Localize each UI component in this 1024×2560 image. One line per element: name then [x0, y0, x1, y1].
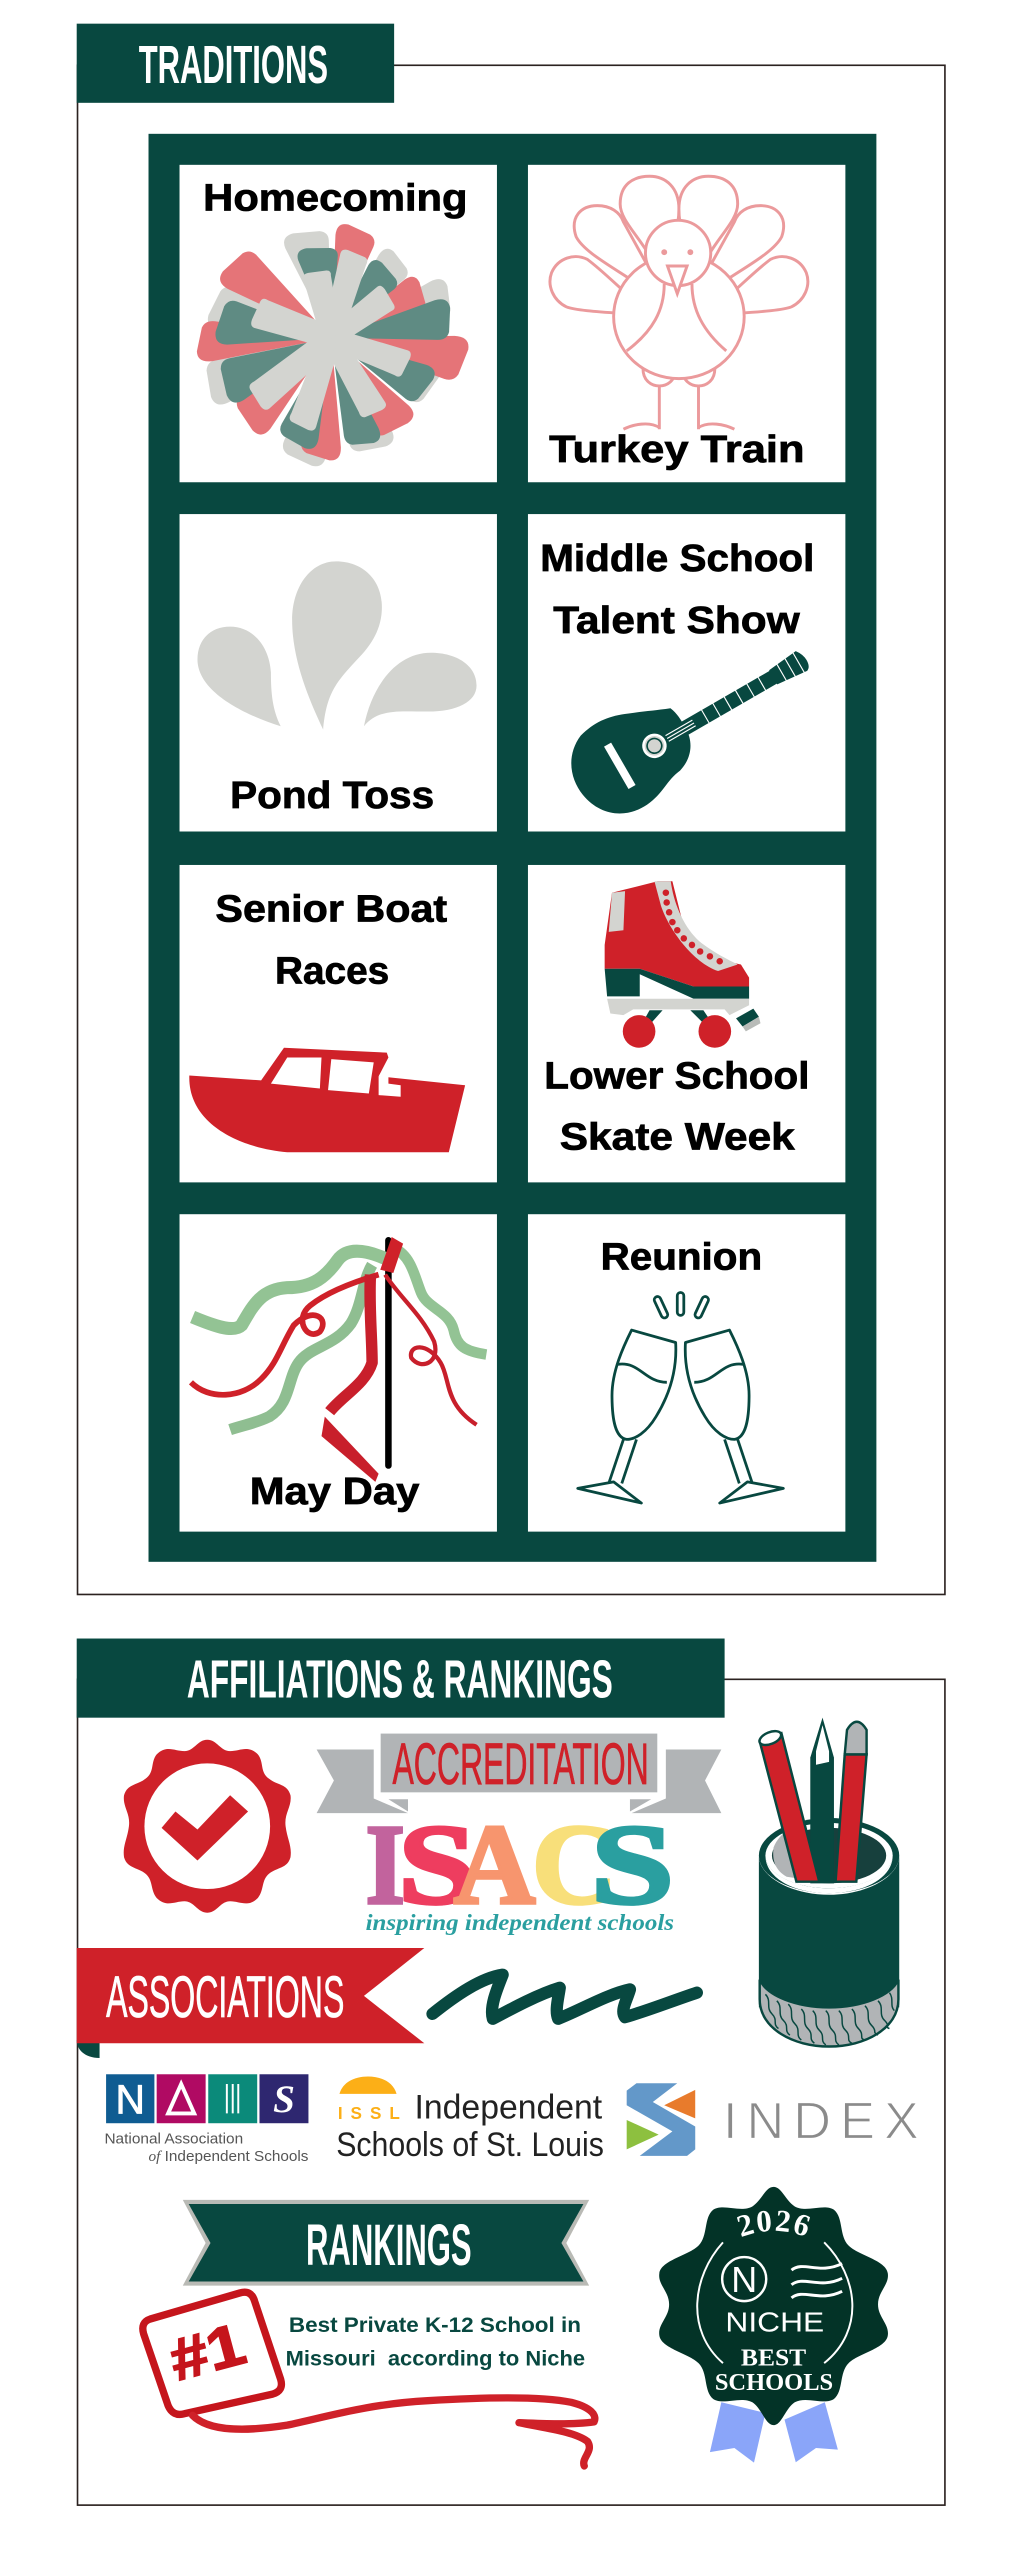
heading: affiliations and rankings: [77, 1639, 725, 1718]
banner: associations: ASSOCIATIONS: [106, 1965, 344, 2030]
logo: NAIS: National Association: [104, 2132, 243, 2148]
icon: maypole ribbons: [191, 1237, 486, 1482]
logo: ISSL: Independent: [415, 2088, 603, 2126]
tile: middle school talent show: Middle School: [540, 537, 814, 579]
logo: ISACS: [366, 1801, 674, 1936]
tile: middle school talent show: Talent Show: [553, 599, 801, 641]
icon: boat: [189, 1048, 465, 1152]
text: best private school: Missouri according to Niche: [286, 2348, 585, 2371]
logo: ISACS: I: [366, 1801, 405, 1928]
affiliations frame: [78, 1679, 945, 2505]
logo: ISSL: Schools of St. Louis: [336, 2126, 604, 2164]
badge: niche best schools: [659, 2186, 888, 2462]
tile: homecoming: Homecoming: [203, 177, 468, 219]
logo: ISACS: inspiring independent schools: [366, 1910, 674, 1936]
text: best private school: [286, 2314, 585, 2371]
tile: reunion: Reunion: [601, 1236, 762, 1278]
tile: turkey train: [549, 176, 808, 470]
tile: may day: May Day: [250, 1470, 420, 1512]
panel: affiliations and rankings: [76, 1638, 946, 2506]
tile: pond toss: Pond Toss: [230, 774, 434, 816]
tile: homecoming: [196, 177, 470, 468]
tile: middle school talent show: [540, 537, 829, 831]
traditions frame: [78, 65, 945, 1594]
logo: ISACS: A: [454, 1801, 535, 1928]
badge: niche best schools: NICHE: [725, 2306, 824, 2337]
icon: scribble: [432, 1975, 697, 2019]
logo: INDEX: INDEX: [723, 2093, 919, 2151]
text: best private school: Best Private K-12 School in: [289, 2314, 581, 2337]
tile: senior boat races: [189, 887, 465, 1152]
logo: NAIS: S: [273, 2078, 295, 2121]
logo: ISACS: S: [591, 1801, 674, 1928]
icon: roller skate: [605, 881, 761, 1048]
banner: accreditation: ACCREDITATION: [392, 1732, 649, 1797]
tile: lower school skate week: [544, 881, 809, 1158]
logo: ISACS: C: [532, 1801, 617, 1928]
heading: affiliations and rankings: AFFILIATIONS & RANKINGS: [187, 1649, 613, 1709]
tile: turkey train: Turkey Train: [549, 428, 805, 470]
red swoosh: [193, 2398, 595, 2466]
badge: niche best schools: 2026: [737, 2210, 810, 2237]
tile: senior boat races: Senior Boat: [215, 887, 448, 929]
tile: lower school skate week: Skate Week: [560, 1116, 795, 1158]
icon: number one stamp: [143, 2292, 281, 2414]
logo: NAIS: N: [116, 2076, 145, 2122]
heading: traditions: TRADITIONS: [139, 35, 328, 95]
logo: ISACS: S: [398, 1801, 477, 1928]
heading: traditions: [77, 24, 394, 103]
logo: ISSL: ISSL: [338, 2103, 400, 2123]
tile: may day: [191, 1237, 486, 1512]
banner: rankings: RANKINGS: [306, 2213, 472, 2278]
logo: ISSL: [336, 2077, 604, 2164]
tile: senior boat races: Races: [275, 949, 389, 991]
tile: lower school skate week: Lower School: [544, 1055, 809, 1097]
icon: number one stamp: #1: [163, 2311, 252, 2394]
icon: check seal: [124, 1740, 291, 1913]
icon: splash: [197, 561, 477, 730]
tile: pond toss: [197, 561, 477, 816]
logo: NAIS: of Independent Schools: [149, 2149, 308, 2165]
logo: NAIS: [104, 2074, 308, 2165]
banner: accreditation: [317, 1732, 721, 1813]
badge: niche best schools: SCHOOLS: [715, 2369, 833, 2396]
icon: pom-pom: [196, 222, 470, 468]
banner: rankings: [183, 2200, 589, 2286]
panel: traditions: [77, 24, 945, 1594]
logo: INDEX: [627, 2083, 919, 2156]
icon: turkey: [550, 176, 808, 429]
banner: associations: [77, 1948, 424, 2058]
icon: pencil cup: [758, 1718, 899, 2047]
icon: guitar: [555, 616, 829, 831]
icon: champagne glasses: [578, 1293, 783, 1503]
tile: reunion: [578, 1236, 783, 1503]
badge: niche best schools: BEST: [741, 2345, 806, 2372]
traditions grid: [149, 134, 876, 1562]
badge: niche best schools: N: [731, 2260, 757, 2300]
